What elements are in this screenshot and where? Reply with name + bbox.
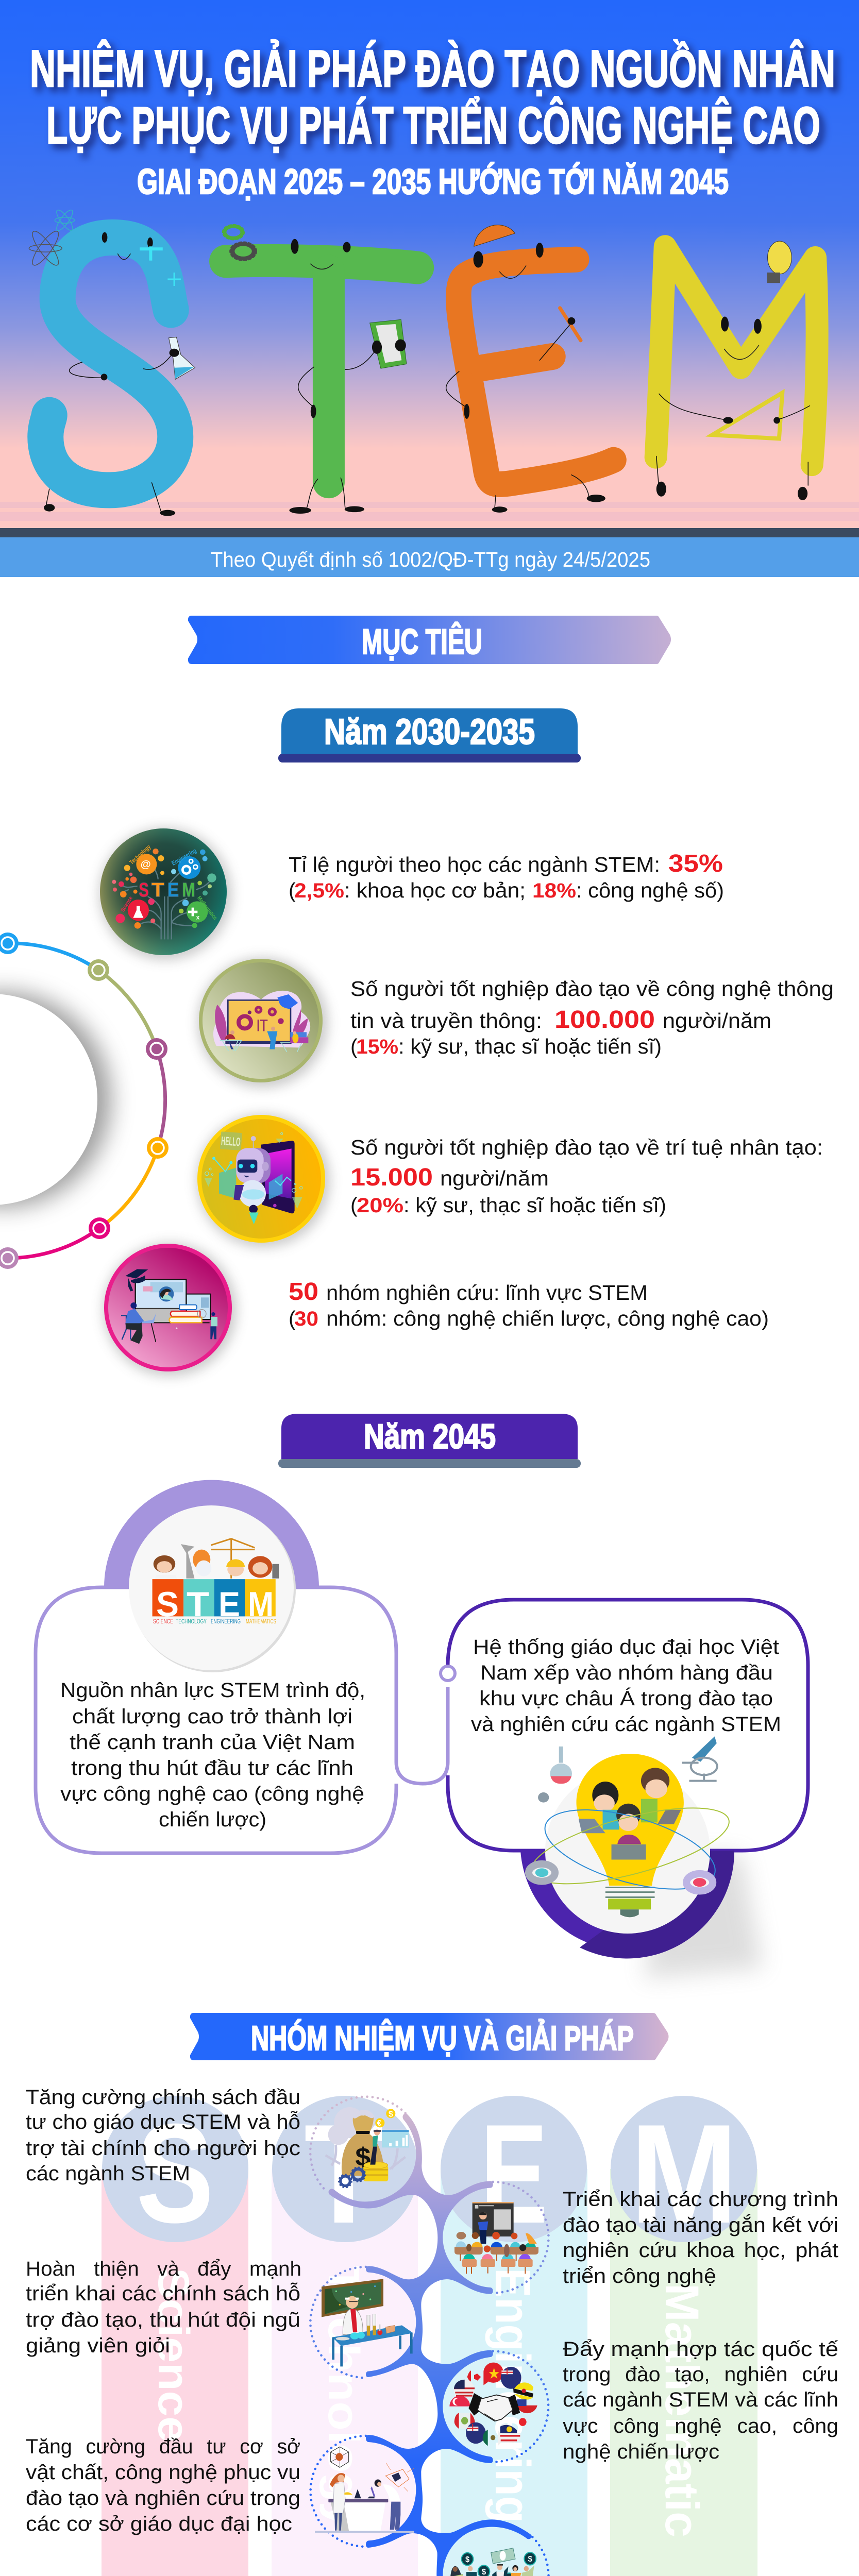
text: task 2: Hoàn thiện và đẩy mạnh — [26, 2258, 301, 2280]
icon: bulb with students — [516, 1739, 745, 1934]
background: STEM columns: Technology — [319, 2265, 368, 2528]
text: task 5: các ngành STEM và các lĩnh — [563, 2388, 838, 2411]
text: task 3: các cơ sở giáo dục đại học — [26, 2513, 292, 2535]
item 2: ICT graduates — [198, 958, 834, 1088]
text: task 4: triển công nghệ — [563, 2265, 716, 2287]
letter T — [223, 225, 417, 514]
text: task 2 — [26, 2258, 301, 2357]
banner: Nhóm nhiệm vụ và giải pháp — [190, 2013, 668, 2060]
text: Asian ranking: Hệ thống giáo dục đại học Việt — [473, 1636, 779, 1658]
icon: STEM tree: T — [151, 879, 164, 901]
text: ICT graduates: Số người tốt nghiệp đào tạo về công nghệ thông — [350, 977, 834, 1001]
banner: Nhóm nhiệm vụ và giải pháp: NHÓM NHIỆM VỤ VÀ GIẢI PHÁP — [251, 2019, 634, 2058]
heading: Năm 2045 — [278, 1414, 581, 1468]
text: task 4: Triển khai các chương trình — [563, 2188, 838, 2211]
text: workforce advantage: trong thu hút đầu tư các lĩnh — [71, 1757, 353, 1780]
text: task 5: trong đào tạo, nghiên cứu — [563, 2363, 838, 2386]
icon: STEM kids: M — [248, 1585, 274, 1624]
text: workforce advantage — [60, 1679, 365, 1831]
background: STEM columns: Science — [149, 2268, 198, 2442]
background: STEM columns — [102, 2095, 757, 2576]
source strip: Theo Quyết định số 1002/QĐ-TTg ngày 24/5/2025 — [211, 548, 650, 571]
icon: STEM tree: E — [167, 879, 179, 901]
text: AI graduates — [350, 1136, 823, 1217]
icon: laboratory — [315, 2447, 414, 2533]
text: workforce advantage: vực công nghệ cao (công nghệ — [60, 1783, 364, 1805]
text: task 2: giảng viên giỏi — [26, 2334, 170, 2357]
source strip — [0, 528, 859, 577]
text: AI graduates: người/năm — [440, 1166, 549, 1190]
icon: STEM tree: Technology — [128, 843, 152, 866]
text: STEM share: 2,5% — [294, 879, 344, 902]
icon: funding crowd: $ — [528, 2555, 532, 2564]
dotted rings — [310, 2097, 549, 2576]
text: Asian ranking: và nghiên cứu các ngành STEM — [471, 1713, 781, 1736]
text: AI graduates: Số người tốt nghiệp đào tạo về trí tuệ nhân tạo: — [350, 1136, 823, 1159]
icon: robot: HELLO — [221, 1134, 241, 1149]
icon: money bag: $ — [389, 2110, 393, 2119]
text: task 1: tư cho giáo dục STEM và hỗ — [26, 2110, 300, 2133]
icon: STEM tree: S — [139, 879, 149, 901]
icon: STEM kids: T — [187, 1585, 209, 1624]
title — [30, 40, 835, 155]
text: research groups — [289, 1278, 769, 1330]
arc timeline — [0, 933, 169, 1269]
heading: Năm 2045: Năm 2045 — [364, 1417, 496, 1456]
icon: money bag: $ — [355, 2143, 371, 2172]
letter S — [28, 209, 195, 516]
text: ICT graduates: tin và truyền thông: — [350, 1009, 542, 1032]
icon: scientist — [322, 2279, 413, 2366]
text: ICT graduates: ( — [350, 1035, 358, 1058]
icon: STEM tree: Engineering — [170, 847, 198, 867]
icon: STEM kids — [129, 1505, 296, 1672]
tree diagram with icons — [310, 2097, 549, 2576]
text: workforce advantage: thế cạnh tranh của Việt Nam — [70, 1731, 355, 1754]
icon: money bag — [326, 2107, 409, 2188]
background: STEM columns: Engineering — [485, 2268, 540, 2523]
text: task 4: đào tạo tài năng gắn kết với — [563, 2213, 838, 2236]
banner: Mục tiêu: MỤC TIÊU — [362, 622, 482, 662]
text: workforce advantage: Nguồn nhân lực STEM trình độ, — [60, 1679, 365, 1702]
panel: higher education card — [441, 1600, 808, 1978]
text: ICT graduates — [350, 977, 834, 1058]
text: AI graduates: 20% — [357, 1194, 403, 1217]
text: STEM share: ( — [289, 878, 296, 902]
text: AI graduates: ( — [350, 1193, 358, 1217]
icon: STEM tree — [99, 828, 231, 960]
icon: money bag: € — [377, 2119, 382, 2128]
icon: funding crowd: $ — [465, 2555, 470, 2564]
text: ICT graduates: : kỹ sư, thạc sĩ hoặc tiến sĩ) — [398, 1035, 662, 1058]
heading: Năm 2030-2035: Năm 2030-2035 — [324, 711, 535, 752]
text: research groups: ( — [289, 1307, 296, 1330]
banner: Mục tiêu — [188, 616, 671, 664]
icon: STEM kids: TECHNOLOGY — [176, 1618, 207, 1625]
text: task 1: trợ tài chính cho người học — [26, 2137, 300, 2160]
header panel — [0, 0, 859, 528]
branches — [329, 2113, 532, 2576]
text: research groups: nhóm: công nghệ chiến lược, công nghệ cao) — [326, 1307, 769, 1330]
text: research groups: 50 — [289, 1278, 318, 1306]
background: STEM columns: T — [304, 2095, 383, 2253]
icon: IT laptop: IT — [256, 1016, 268, 1035]
icon: STEM tree: Mathematics — [196, 895, 218, 921]
text: task 1: Tăng cường chính sách đầu — [26, 2086, 300, 2109]
text: STEM share — [289, 850, 724, 902]
background: STEM columns: Mathematic — [655, 2283, 708, 2537]
icon: STEM tree: M — [182, 879, 195, 901]
icon: classroom — [454, 2202, 538, 2274]
icon: STEM kids: E — [218, 1585, 240, 1624]
illustration: STEM characters — [28, 209, 817, 516]
text: task 3: Tăng cường đầu tư cơ sở — [26, 2435, 300, 2458]
text: STEM share: 18% — [532, 879, 576, 902]
text: task 3 — [26, 2435, 300, 2535]
text: task 5 — [563, 2338, 838, 2463]
item 1: STEM share — [99, 828, 724, 960]
icon: e-learning desk — [104, 1243, 237, 1376]
text: workforce advantage: chất lượng cao trở thành lợi — [72, 1705, 352, 1728]
text: Asian ranking: khu vực châu Á trong đào tạo — [479, 1687, 773, 1710]
icon: funding crowd — [450, 2548, 536, 2576]
icon: STEM tree: @ — [141, 858, 151, 870]
text: task 5: vực công nghệ cao, công — [563, 2415, 838, 2437]
text: STEM share: 35% — [668, 850, 723, 877]
text: ICT graduates: người/năm — [663, 1009, 771, 1032]
text: task 4: nghiên cứu khoa học, phát — [563, 2239, 838, 2262]
text: task 3: vật chất, công nghệ phục vụ — [26, 2461, 300, 2484]
text: task 3: đào tạo và nghiên cứu trong — [26, 2487, 300, 2510]
heading: Năm 2030-2035 — [278, 708, 581, 762]
text: STEM share: : khoa học cơ bản; — [344, 878, 526, 902]
background: STEM columns: S — [136, 2095, 214, 2252]
text: task 4 — [563, 2188, 838, 2287]
text: AI graduates: : kỹ sư, thạc sĩ hoặc tiến sĩ) — [403, 1193, 666, 1217]
text: Asian ranking — [471, 1636, 781, 1736]
icon: IT laptop — [198, 958, 328, 1088]
text: task 1 — [26, 2086, 300, 2185]
text: research groups: nhóm nghiên cứu: lĩnh vực STEM — [326, 1281, 648, 1304]
icon: STEM kids: ENGINEERING — [211, 1618, 241, 1625]
text: task 1: các ngành STEM — [26, 2162, 190, 2185]
text: ICT graduates: 15% — [356, 1036, 398, 1058]
text: task 5: nghệ chiến lược — [563, 2441, 719, 2463]
letter M — [656, 241, 817, 500]
text: STEM share: Tỉ lệ người theo học các ngành STEM: — [289, 853, 660, 876]
text: AI graduates: 15.000 — [350, 1164, 433, 1191]
item 3: AI graduates — [197, 1114, 823, 1247]
text: STEM share: : công nghệ số) — [576, 878, 724, 902]
panel: STEM workforce card — [36, 1480, 448, 1853]
icon: STEM tree: x — [196, 913, 200, 921]
text: task 5: Đẩy mạnh hợp tác quốc tế — [563, 2338, 838, 2361]
text: task 2: trợ đào tạo, thu hút đội ngũ — [26, 2309, 300, 2331]
icon: STEM kids: SCIENCE — [153, 1618, 173, 1625]
letter E — [446, 225, 614, 513]
icon: STEM tree: Science — [120, 895, 134, 913]
background: STEM columns: E — [480, 2095, 548, 2253]
text: workforce advantage: chiến lược) — [159, 1808, 266, 1831]
icon: STEM kids: S — [156, 1585, 179, 1624]
background: STEM columns: M — [630, 2095, 738, 2253]
text: ICT graduates: 100.000 — [554, 1006, 655, 1033]
text: research groups: 30 — [294, 1308, 318, 1330]
text: task 2: triển khai các chính sách hỗ — [26, 2282, 300, 2305]
icon: international flags — [449, 2363, 537, 2446]
item 4: research groups — [104, 1243, 769, 1376]
icon: robot — [197, 1114, 330, 1247]
icon: STEM kids: MATHEMATICS — [246, 1618, 276, 1625]
text: Asian ranking: Nam xếp vào nhóm hàng đầu — [480, 1662, 773, 1684]
